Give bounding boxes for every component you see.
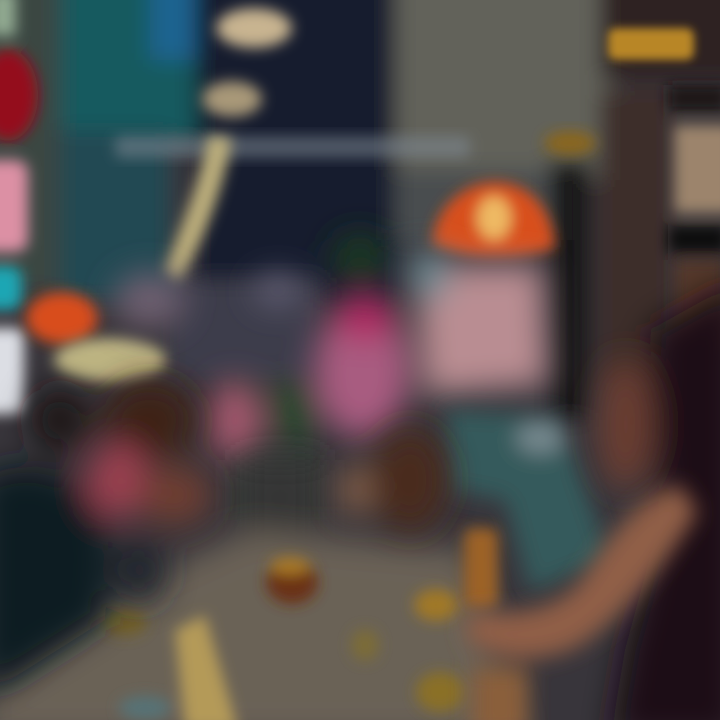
sign: small amber [544,131,596,155]
seated people on the left [0,380,211,690]
teal dress [445,410,610,592]
left edge colour blocks [0,0,38,414]
floor [0,460,520,720]
drink glass [464,528,498,608]
sign: orange top right [608,28,694,60]
right wall shelves [668,85,720,350]
pink figures and clothes [114,234,548,460]
arm [465,485,698,720]
floor reflection [103,557,464,720]
orange hanging lamp [432,182,555,257]
cream lamp [54,338,166,382]
hanging cream beads [164,8,292,282]
woman with long dark hair [597,280,720,720]
sign: blurred banner text [115,136,470,158]
small orange lamp [26,292,98,344]
seated person in the middle [339,428,448,532]
